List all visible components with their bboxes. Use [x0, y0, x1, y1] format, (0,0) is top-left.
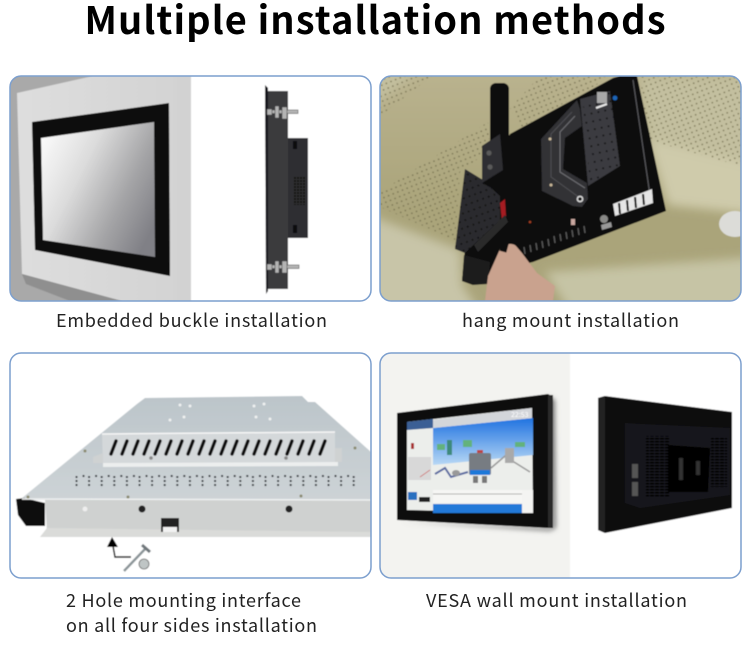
- hand: [485, 239, 555, 301]
- metal rear plate: [16, 396, 371, 537]
- wall with embedded panel: [17, 76, 191, 301]
- caption: VESA: VESA wall mount installation: [426, 587, 687, 613]
- icon: screw and washer: [124, 545, 150, 571]
- caption: four-side mounting: [66, 587, 317, 638]
- side view of panel with clamps: [265, 85, 308, 294]
- vented power box: [93, 432, 342, 467]
- rear monitor with VESA mount: [598, 396, 732, 533]
- caption: four-side mounting: on all four sides installation: [66, 612, 317, 638]
- monitor back: [462, 76, 666, 285]
- panel: embedded buckle installation: [10, 76, 371, 301]
- front monitor with process screen: [397, 394, 556, 531]
- caption: four-side mounting: 2 Hole mounting interface: [66, 587, 301, 613]
- panel: four-side mounting: [10, 353, 371, 578]
- caption: hang mount: hang mount installation: [462, 307, 679, 333]
- ceiling: [380, 76, 740, 300]
- front monitor with process screen: 22:53: [511, 410, 529, 420]
- arrow to mounting hole: [107, 537, 131, 557]
- caption: embedded: Embedded buckle installation: [56, 307, 327, 333]
- panel: VESA wall mount: [380, 353, 741, 578]
- panel: hang mount installation: [379, 75, 742, 302]
- perforated bracket and pole: [455, 83, 588, 253]
